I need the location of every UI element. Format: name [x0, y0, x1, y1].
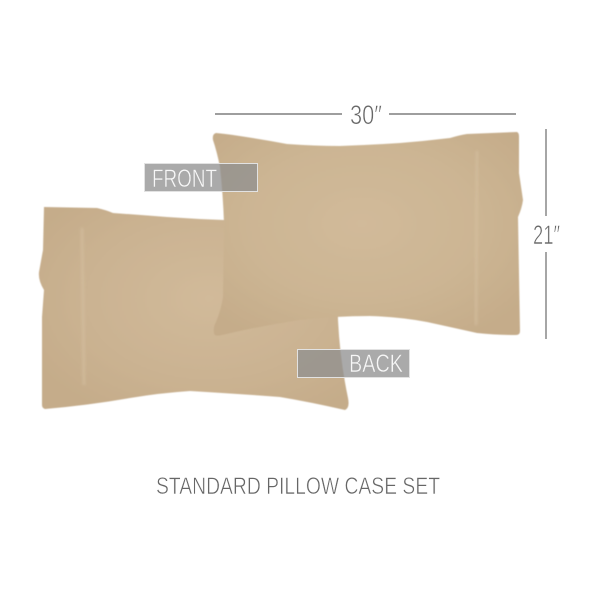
label: back: [298, 350, 410, 378]
caption: STANDARD PILLOW CASE SET: [156, 473, 440, 500]
back pillow: [39, 207, 349, 410]
hem line: [82, 228, 84, 385]
height dimension: 21 inches: 21″: [533, 220, 560, 250]
label: back: BACK: [349, 350, 403, 378]
front pillow: [213, 132, 523, 336]
label: front: FRONT: [152, 165, 217, 193]
hem line: [476, 151, 477, 325]
width dimension: 30 inches: 30″: [350, 100, 382, 130]
